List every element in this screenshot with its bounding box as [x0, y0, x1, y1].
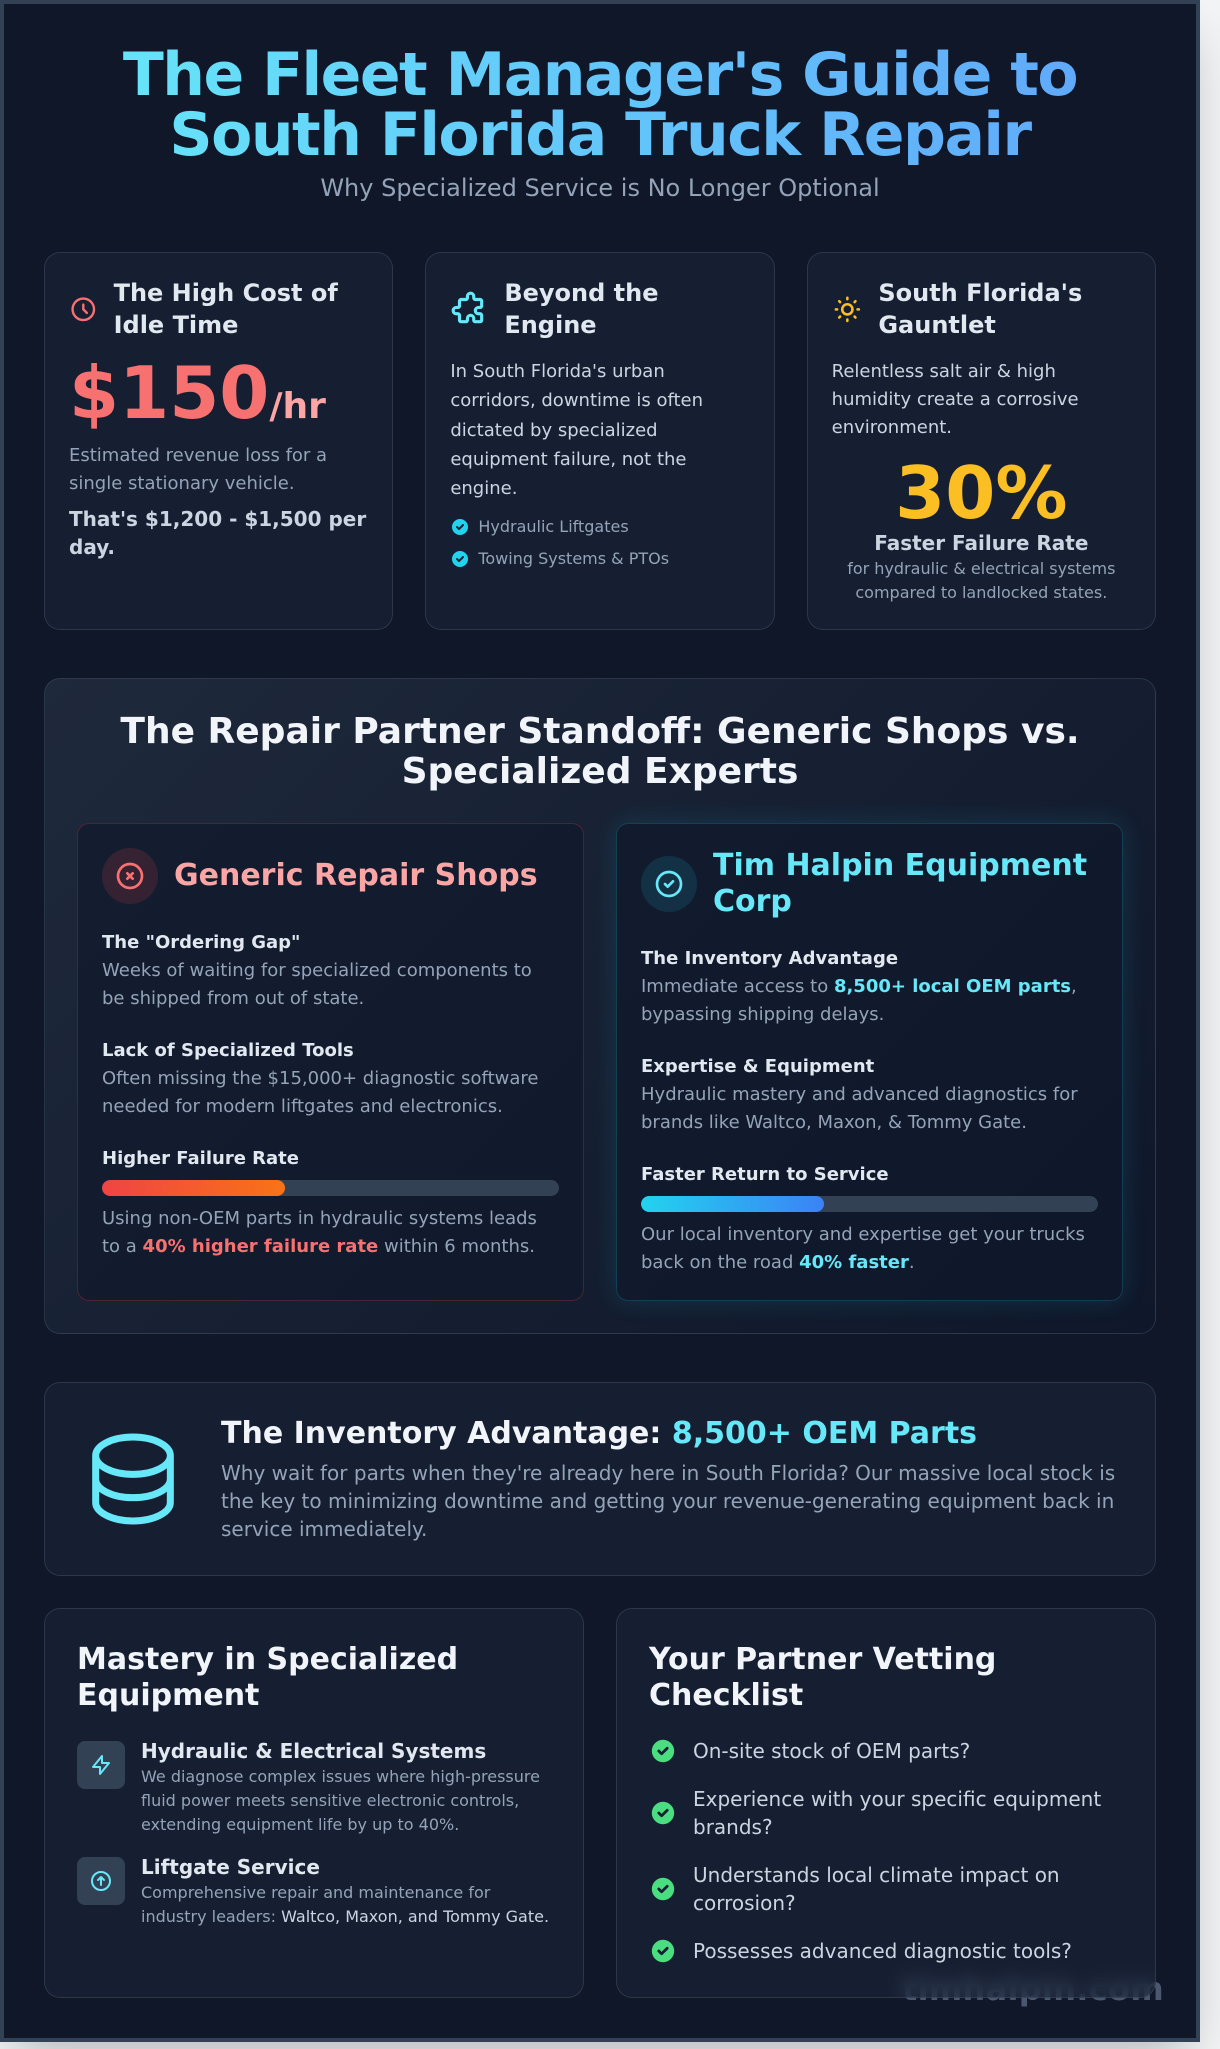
- point: specialized tools: [102, 1040, 538, 1117]
- panel: generic repair shops: [77, 823, 584, 1301]
- panel: repair partner standoff: [44, 678, 1156, 1334]
- service: hydraulic and electrical: We diagnose complex issues where high-pressure fluid power meets sensitive electronic controls, extending equipment life by up to 40%.: [141, 1767, 540, 1834]
- stat number: 30%: [895, 451, 1068, 535]
- service: liftgate: Comprehensive repair and maintenance for industry leaders: Waltco, Maxon, and Tommy Gate.: [141, 1883, 549, 1926]
- card text: Relentless salt air & high humidity create a corrosive environment.: [832, 361, 1079, 438]
- point: expertise: Expertise & Equipment: [641, 1056, 874, 1077]
- point: specialized tools: Lack of Specialized Tools: [102, 1040, 354, 1061]
- checklist: Understands local climate impact on corrosion?: [693, 1863, 1060, 1915]
- point: expertise: Hydraulic mastery and advanced diagnostics for brands like Waltco, Maxon, & Tommy Gate.: [641, 1084, 1078, 1133]
- subtitle: Why Specialized Service is No Longer Optional: [320, 174, 880, 202]
- point: ordering gap: The "Ordering Gap": [102, 932, 300, 953]
- point: return to service with progress bar: Faster Return to Service: [641, 1164, 889, 1185]
- stat note: for hydraulic & electrical systems compared to landlocked states.: [847, 559, 1115, 602]
- comparison columns: [77, 818, 1129, 1307]
- icon: database: [92, 1434, 174, 1524]
- panel: partner vetting checklist: [616, 1608, 1156, 1998]
- card heading with puzzle icon: Beyond the Engine: [504, 279, 658, 339]
- daily cost callout: That's $1,200 - $1,500 per day.: [69, 507, 366, 559]
- heading: Your Partner Vetting Checklist: [649, 1642, 996, 1713]
- point: ordering gap: Weeks of waiting for specialized components to be shipped from out of state.: [102, 960, 532, 1009]
- column heading: Tim Halpin Equipment Corp: [713, 848, 1087, 919]
- stat: $150 per hour: $150/hr: [69, 351, 326, 435]
- title: The Fleet Manager's Guide to South Florida Truck Repair: [123, 40, 1077, 170]
- column heading: [102, 848, 538, 904]
- panel: high cost of idle time: [44, 252, 393, 630]
- service: hydraulic and electrical: Hydraulic & Electrical Systems: [141, 1739, 486, 1763]
- checklist: [652, 1739, 1101, 1963]
- section heading: The Repair Partner Standoff: Generic Shops vs. Specialized Experts: [120, 711, 1080, 792]
- stat label: Faster Failure Rate: [874, 531, 1088, 555]
- checklist: Possesses advanced diagnostic tools?: [693, 1939, 1072, 1963]
- heading: Mastery in Specialized Equipment: [77, 1642, 458, 1713]
- point: inventory: [641, 948, 1077, 1025]
- top three stat cards: [44, 252, 1156, 630]
- stat description: Estimated revenue loss for a single stationary vehicle.: [69, 445, 327, 494]
- heading: The Inventory Advantage: 8,500+ OEM Parts: [221, 1416, 977, 1451]
- description: Why wait for parts when they're already here in South Florida? Our massive local stock is the key to minimizing downtime and getting your revenue-generating equipment back in service immediately.: [221, 1461, 1115, 1541]
- point: return to service with progress bar: [641, 1164, 1098, 1273]
- service: hydraulic and electrical: [77, 1739, 540, 1834]
- panel: mastery in specialized equipment: [44, 1608, 584, 1998]
- equipment list: [452, 517, 669, 568]
- panel: beyond the engine: [425, 252, 775, 630]
- card heading with sun icon: South Florida's Gauntlet: [878, 279, 1082, 339]
- card text: In South Florida's urban corridors, downtime is often dictated by specialized equipment failure, not the engine.: [450, 361, 703, 499]
- service: liftgate: [77, 1855, 549, 1926]
- header: [123, 40, 1077, 202]
- point: inventory: Immediate access to 8,500+ local OEM parts, bypassing shipping delays.: [641, 976, 1077, 1025]
- point: failure rate with progress bar: Higher Failure Rate: [102, 1148, 299, 1169]
- point: return to service with progress bar: Our local inventory and expertise get your trucks back on the road 40% faster.: [641, 1224, 1085, 1273]
- point: inventory: The Inventory Advantage: [641, 948, 898, 969]
- stat: 30 percent faster failure rate: [847, 451, 1115, 602]
- card heading with clock icon: The High Cost of Idle Time: [114, 279, 338, 339]
- point: failure rate with progress bar: Using non-OEM parts in hydraulic systems leads to a 40% higher failure rate within 6 months.: [102, 1208, 537, 1257]
- panel: tim halpin equipment corp: [616, 823, 1123, 1301]
- equipment list: Towing Systems & PTOs: [478, 549, 669, 568]
- equipment list: Hydraulic Liftgates: [478, 517, 629, 536]
- watermark: timhalpin.com: [902, 1970, 1164, 2008]
- checklist: On-site stock of OEM parts?: [693, 1739, 970, 1763]
- panel: south florida's gauntlet: [807, 252, 1156, 630]
- checklist: Experience with your specific equipment brands?: [693, 1787, 1101, 1839]
- bottom two panels: [44, 1608, 1156, 1998]
- panel: inventory advantage: [44, 1382, 1156, 1576]
- point: specialized tools: Often missing the $15,000+ diagnostic software needed for modern liftgates and electronics.: [102, 1068, 538, 1117]
- column heading: Generic Repair Shops: [174, 858, 538, 893]
- inventory text: [221, 1416, 1115, 1541]
- point: failure rate with progress bar: [102, 1148, 559, 1257]
- point: expertise: [641, 1056, 1078, 1133]
- service: liftgate: Liftgate Service: [141, 1855, 320, 1879]
- point: ordering gap: [102, 932, 532, 1009]
